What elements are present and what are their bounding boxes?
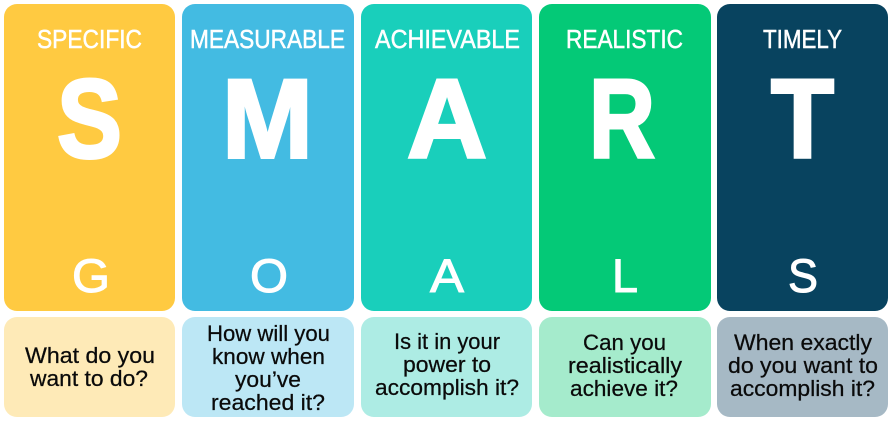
- panel: achievable: [361, 4, 532, 417]
- heading: measurable: MEASURABLE: [190, 24, 345, 54]
- question text: timely: accomplish it?: [730, 376, 875, 401]
- big letter M: M: [222, 56, 313, 182]
- heading: specific: SPECIFIC: [37, 24, 142, 54]
- card: achievable: [361, 4, 532, 311]
- question text: specific: [25, 343, 155, 391]
- question text: realistic: achieve it?: [570, 376, 678, 401]
- heading: realistic: REALISTIC: [566, 24, 683, 54]
- question text: realistic: Can you: [583, 330, 666, 355]
- card: timely: [717, 4, 888, 311]
- card: specific: [4, 4, 175, 311]
- big letter A: A: [407, 56, 487, 182]
- question text: specific: want to do?: [29, 366, 148, 391]
- big letter S: S: [57, 56, 122, 182]
- panel: timely: [717, 4, 888, 417]
- big letter T: T: [771, 56, 834, 182]
- question text: timely: [728, 330, 878, 401]
- goals letter O: O: [250, 249, 288, 302]
- question text: measurable: reached it?: [211, 390, 325, 415]
- question text: realistic: [568, 330, 682, 401]
- question card: specific: [4, 317, 175, 417]
- question text: timely: When exactly: [734, 330, 872, 355]
- question text: measurable: [207, 321, 330, 415]
- question text: achievable: Is it in your: [394, 329, 500, 354]
- goals letter A: A: [430, 249, 465, 302]
- goals letter G: G: [72, 249, 110, 302]
- card: measurable: [182, 4, 354, 311]
- question text: measurable: you’ve: [235, 367, 301, 392]
- panel: measurable: [182, 4, 354, 417]
- question card: achievable: [361, 317, 532, 417]
- question text: measurable: know when: [212, 344, 325, 369]
- heading: achievable: ACHIEVABLE: [375, 24, 520, 54]
- goals letter L: L: [612, 249, 638, 302]
- question text: achievable: accomplish it?: [375, 375, 519, 400]
- panel: realistic: [539, 4, 711, 417]
- heading: timely: TIMELY: [763, 24, 842, 54]
- question text: achievable: [375, 329, 519, 400]
- question text: specific: What do you: [25, 343, 155, 368]
- panel: specific: [4, 4, 175, 417]
- question text: achievable: power to: [403, 352, 491, 377]
- question card: realistic: [539, 317, 711, 417]
- big letter R: R: [589, 56, 655, 182]
- question text: timely: do you want to: [728, 353, 878, 378]
- question card: measurable: [182, 317, 354, 417]
- question text: realistic: realistically: [568, 353, 682, 378]
- question card: timely: [717, 317, 888, 417]
- goals letter S: S: [788, 249, 818, 302]
- card: realistic: [539, 4, 711, 311]
- question text: measurable: How will you: [207, 321, 330, 346]
